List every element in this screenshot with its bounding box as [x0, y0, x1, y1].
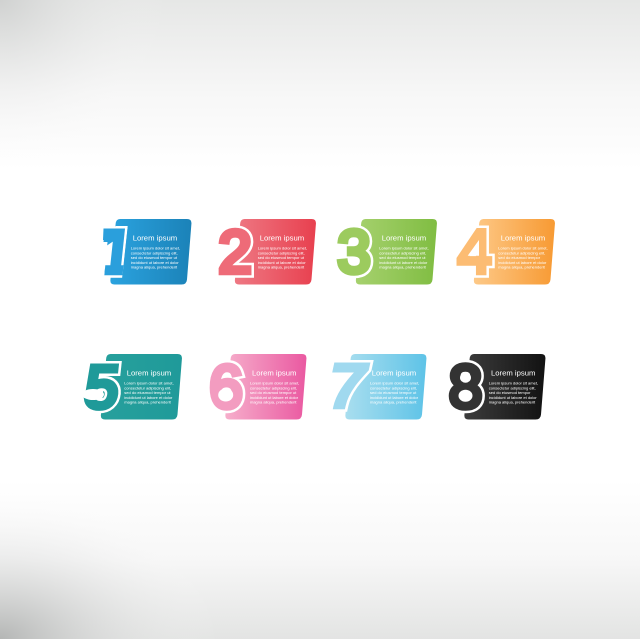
- number 5: 5: [82, 354, 122, 420]
- body text 7: consectetur adipiscing elit,: [370, 385, 417, 390]
- heading 2: Lorem ipsum: [260, 233, 304, 242]
- heading 3: Lorem ipsum: [382, 233, 426, 242]
- body text 6: incididunt ut labore et dolor: [250, 395, 299, 400]
- body text 4: magna aliqua, prehenderit: [498, 265, 546, 270]
- body text 7: incididunt ut labore et dolor: [370, 395, 419, 400]
- body text 6: sed do eiusmod tempor ut: [250, 390, 297, 395]
- body text 3: magna aliqua, prehenderit: [379, 265, 427, 270]
- body text 8: sed do eiusmod tempor: [489, 390, 531, 395]
- number 3: 3: [337, 218, 371, 286]
- body text 5: consectetur adipiscing elit,: [124, 385, 171, 390]
- number 4: 4: [458, 218, 491, 286]
- heading 6: Lorem ipsum: [252, 368, 296, 377]
- body text 2: magna aliqua, prehenderit: [258, 265, 305, 270]
- number 8: 8: [449, 354, 482, 420]
- panel: step 2: [218, 218, 316, 286]
- heading 7: Lorem ipsum: [372, 368, 416, 377]
- card 1: [110, 219, 191, 284]
- number 1: 1: [96, 219, 136, 285]
- card 5: [101, 354, 182, 420]
- body text 8: magna aliqua, prehenderit: [489, 400, 536, 405]
- body text 2: Lorem ipsum dolor sit amet,: [258, 246, 307, 251]
- heading 5: Lorem ipsum: [127, 368, 171, 377]
- card 3: [356, 219, 437, 284]
- body text 1: Lorem ipsum dolor sit amet,: [131, 246, 180, 251]
- body text 7: Lorem ipsum dolor sit amet,: [370, 381, 419, 386]
- body text 2: sed do eiusmod tempor ut: [258, 255, 305, 260]
- number 7: 7: [322, 352, 373, 420]
- number 3: 3: [337, 218, 371, 286]
- panel: step 3: [337, 218, 437, 286]
- heading 1: Lorem ipsum: [133, 233, 177, 242]
- number 2: 2: [218, 218, 252, 286]
- card 8: [464, 354, 545, 420]
- body text 6: magna aliqua, prehenderit: [250, 400, 297, 405]
- body text 3: consectetur adipiscing elit,: [379, 250, 426, 255]
- body text 8: consectetur adipiscing elit,: [489, 385, 536, 390]
- body text 2: consectetur adipiscing elit,: [258, 250, 305, 255]
- number 2: 2: [218, 218, 252, 286]
- body text 5: sed do eiusmod tempor ut: [124, 390, 171, 395]
- panel: step 5: [82, 354, 182, 420]
- body text 3: sed do eiusmod tempor ut: [379, 255, 426, 260]
- number 1: [103, 226, 128, 278]
- body text 5: Lorem ipsum dolor sit amet,: [124, 381, 174, 386]
- body text 6: consectetur adipiscing elit,: [250, 385, 297, 390]
- body text 1: sed do eiusmod tempor ut: [131, 255, 178, 260]
- panel: step 6: [209, 354, 306, 420]
- body text 8: incididunt ut labore et dolor: [489, 395, 537, 400]
- panel: step 4: [458, 218, 555, 286]
- body text 4: sed do eiusmod tempor: [498, 255, 541, 260]
- body text 8: Lorem ipsum dolor sit amet,: [489, 381, 538, 386]
- number 8: 8: [449, 354, 482, 420]
- body text 4: consectetur adipiscing elit,: [498, 250, 545, 255]
- card 2: [235, 219, 316, 284]
- heading 8: Lorem ipsum: [491, 368, 535, 377]
- number 1: 1: [96, 219, 136, 285]
- number 6: 6: [209, 354, 243, 420]
- body text 5: magna aliqua, prehenderit: [124, 400, 172, 405]
- body text 5: incididunt ut labore et dolor: [124, 395, 173, 400]
- body text 1: magna aliqua, prehenderit: [131, 265, 178, 270]
- body text 1: consectetur adipiscing elit,: [131, 250, 178, 255]
- number 4: 4: [458, 218, 491, 286]
- number 5: 5: [82, 354, 122, 420]
- card 4: [474, 219, 555, 284]
- card 6: [225, 354, 306, 420]
- number 7: 7: [322, 352, 373, 420]
- body text 7: sed do eiusmod tempor ut: [370, 390, 417, 395]
- body text 6: Lorem ipsum dolor sit amet,: [250, 381, 299, 386]
- body text 4: Lorem ipsum dolor sit amet,: [498, 246, 548, 251]
- panel: step 8: [449, 354, 545, 420]
- body text 4: incididunt ut labore et dolor: [498, 260, 547, 265]
- heading 4: Lorem ipsum: [501, 233, 545, 242]
- panel: step 1: [96, 219, 191, 285]
- body text 1: incididunt ut labore et dolor: [131, 260, 179, 265]
- body text 3: incididunt ut labore et dolor: [379, 260, 428, 265]
- card 7: [345, 354, 426, 420]
- panel: step 7: [322, 352, 426, 420]
- number 6: 6: [209, 354, 243, 420]
- body text 7: magna aliqua, prehenderit: [370, 400, 417, 405]
- body text 3: Lorem ipsum dolor sit amet,: [379, 246, 429, 251]
- body text 2: incididunt ut labore et dolor: [258, 260, 306, 265]
